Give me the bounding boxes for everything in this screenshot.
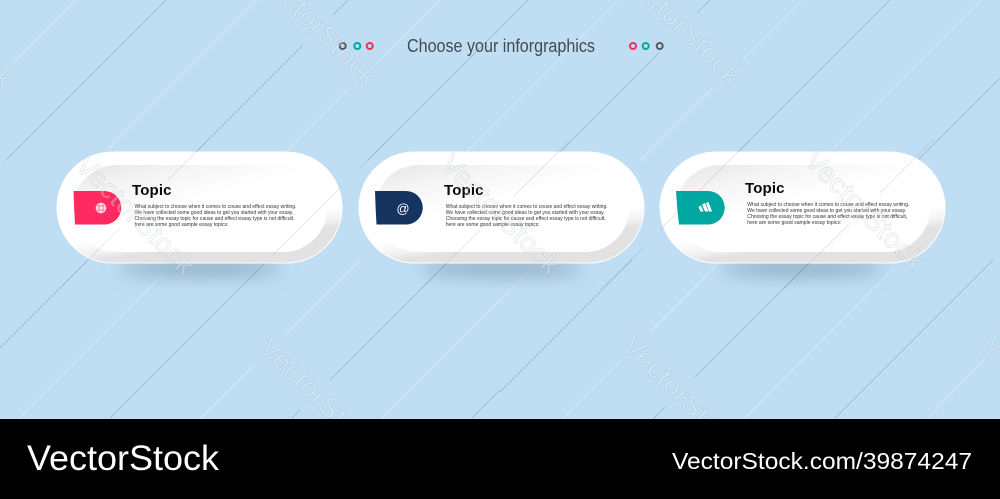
watermarks: VectorStock [254, 331, 386, 464]
tab: pink with globe icon [74, 191, 121, 224]
text block: Choosing the essay topic for cause and effect essay type is not difficult, [446, 216, 606, 222]
text block: We have collected some good ideas to get you started with your essay. [747, 208, 907, 214]
text block: Choosing the essay topic for cause and effect essay type is not difficult, [134, 216, 295, 222]
tab: teal with chart icon [676, 191, 725, 224]
text block: here are some good sample essay topics: [747, 220, 842, 226]
footer image id: VectorStock.com/39874247 [672, 448, 972, 474]
icon: stripes [698, 202, 712, 212]
text block: We have collected some good ideas to get you started with your essay. [446, 210, 605, 216]
text block: What subject to choose when it comes to couse and effect essay writing. [747, 202, 910, 208]
watermarks: VectorStock [70, 149, 202, 282]
decorative rings right [630, 43, 663, 49]
text block: What subject to choose when it comes to couse and effect essay writing. [446, 204, 608, 210]
watermarks: VectorStock [435, 148, 567, 281]
text block: here are some good sample essay topics: [446, 222, 540, 228]
panel: card 2 [359, 140, 644, 290]
icon: globe [96, 203, 106, 213]
text block [747, 202, 910, 226]
icon: at sign: @ [396, 201, 410, 216]
text block [134, 204, 297, 228]
heading: Topic: Topic [132, 182, 172, 199]
heading: Topic: Topic [745, 180, 784, 197]
watermarks: VectorStock [617, 329, 749, 462]
panel: card 1 [57, 141, 342, 286]
text block: Choosing the essay topic for cause and effect essay type is not difficult, [747, 214, 908, 220]
footer brand: VectorStock [27, 439, 220, 478]
decorative rings left [340, 43, 373, 49]
title: Choose your inforgraphics [407, 36, 595, 56]
watermarks: VectorStock [799, 144, 931, 277]
tab: navy with at sign icon [375, 191, 423, 224]
heading: Topic: Topic [444, 182, 484, 199]
text block: We have collected some good ideas to get you started with your essay. [134, 210, 294, 216]
text block [446, 204, 608, 228]
text block: What subject to choose when it comes to couse and effect essay writing. [134, 204, 297, 210]
footer bar [0, 419, 1000, 499]
text block: here are some good sample essay topics: [134, 222, 229, 228]
panel: card 3 [660, 140, 945, 288]
card shadows [118, 260, 884, 276]
